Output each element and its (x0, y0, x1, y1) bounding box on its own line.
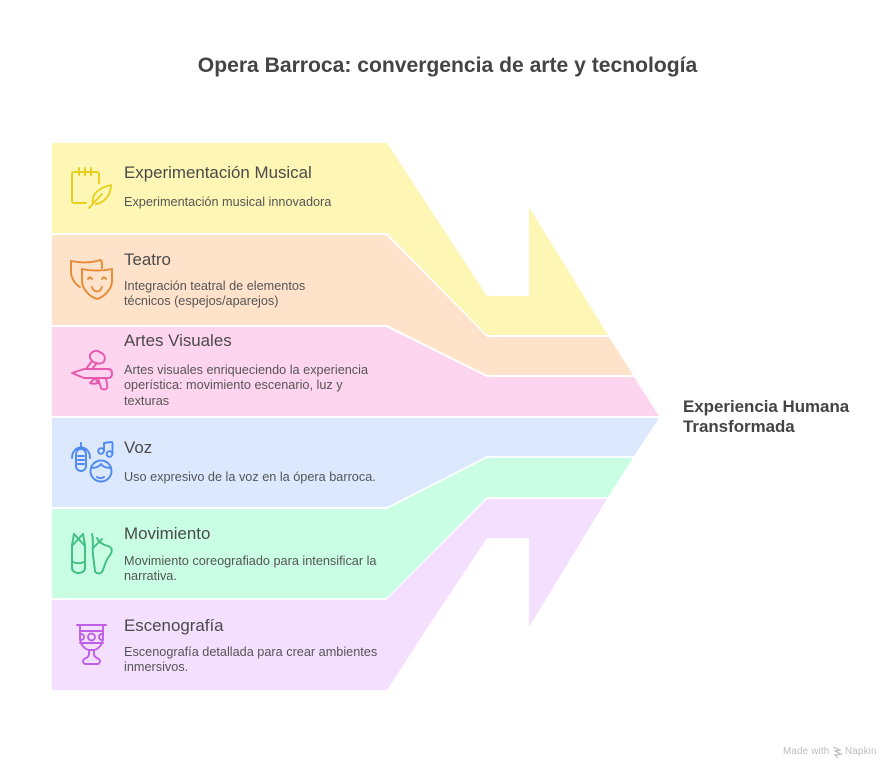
icon: theatre masks (71, 260, 112, 299)
panel: Experimentación Musical (52, 143, 608, 335)
description: inmersivos. (124, 660, 188, 674)
icon: microphone, note and singer (72, 442, 113, 482)
description: Escenografía detallada para crear ambientes (124, 645, 377, 659)
title: Opera Barroca: convergencia de arte y tecnología (198, 54, 697, 77)
heading: Voz (124, 438, 152, 457)
panel: Movimiento (52, 458, 633, 598)
watermark (783, 746, 877, 758)
heading: Movimiento (124, 524, 210, 543)
description: Artes visuales enriqueciendo la experiencia (124, 363, 369, 377)
icon: goblet (77, 625, 106, 664)
description: operística: movimiento escenario, luz y (124, 378, 343, 392)
icon: airbrush (72, 351, 112, 390)
watermark: Made with (783, 746, 829, 757)
panel: Teatro (52, 235, 633, 375)
panel: Voz (52, 418, 659, 507)
heading: Artes Visuales (124, 331, 232, 350)
description: Uso expresivo de la voz en la ópera barroca. (124, 470, 376, 484)
description: técnicos (espejos/aparejos) (124, 294, 278, 308)
icon: ballet shoes (72, 534, 112, 573)
description: texturas (124, 394, 169, 408)
panel: Escenografía (52, 499, 607, 690)
heading: Experimentación Musical (124, 163, 312, 182)
panel: Artes Visuales (52, 327, 659, 416)
heading: Teatro (124, 250, 171, 269)
description: narrativa. (124, 569, 177, 583)
icon: notepad and quill (72, 168, 111, 208)
description: Integración teatral de elementos (124, 279, 305, 293)
description: Experimentación musical innovadora (124, 195, 332, 209)
watermark: Napkin (845, 746, 877, 757)
description: Movimiento coreografiado para intensificar la (124, 554, 377, 568)
outcome label: Transformada (683, 417, 795, 436)
icon: Napkin logo (833, 747, 841, 758)
outcome label: Experiencia Humana (683, 397, 850, 416)
heading: Escenografía (124, 616, 224, 635)
